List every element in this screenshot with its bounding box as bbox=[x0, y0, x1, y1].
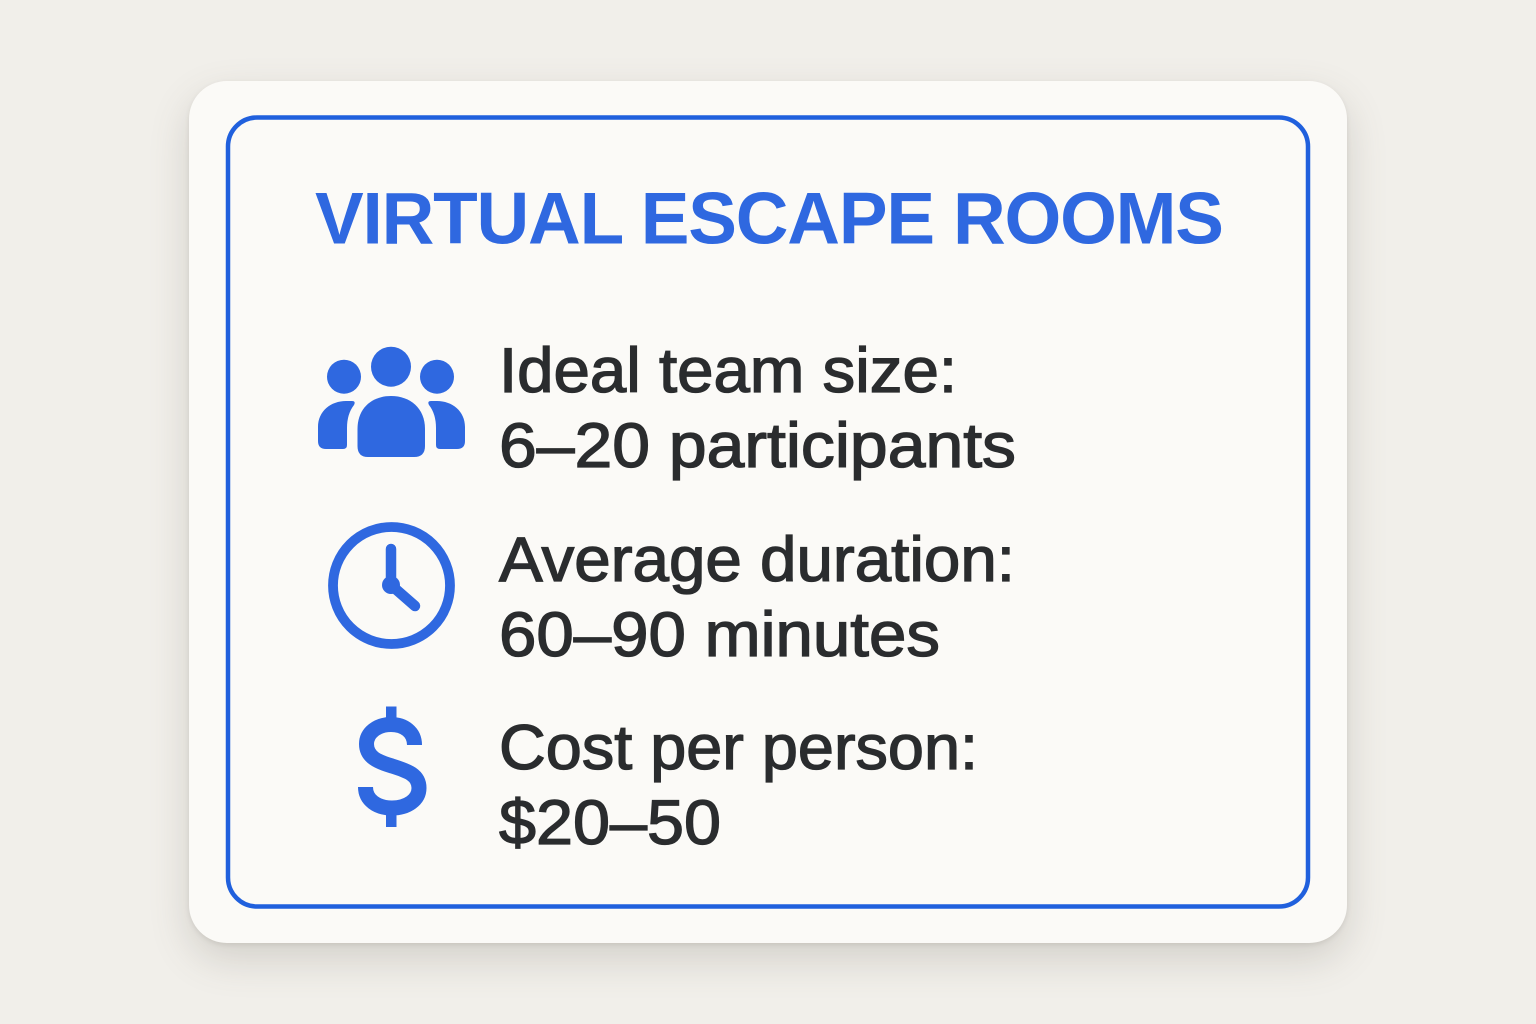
average duration text bbox=[499, 525, 1015, 670]
average duration text: 60–90 minutes bbox=[499, 600, 940, 670]
team size text bbox=[499, 336, 1016, 481]
average duration text: Average duration: bbox=[499, 525, 1015, 595]
icon: dollar sign bbox=[366, 706, 419, 827]
cost per person text: $20–50 bbox=[499, 788, 721, 858]
cost per person text: Cost per person: bbox=[499, 713, 978, 783]
icon: team of three people bbox=[318, 347, 465, 457]
title: VIRTUAL ESCAPE ROOMS bbox=[315, 178, 1224, 260]
panel: card background bbox=[189, 81, 1347, 943]
icon: clock bbox=[333, 527, 450, 644]
panel: blue inner border bbox=[228, 118, 1308, 906]
team size text: Ideal team size: bbox=[499, 336, 957, 406]
cost per person text bbox=[499, 713, 978, 858]
team size text: 6–20 participants bbox=[499, 411, 1016, 481]
